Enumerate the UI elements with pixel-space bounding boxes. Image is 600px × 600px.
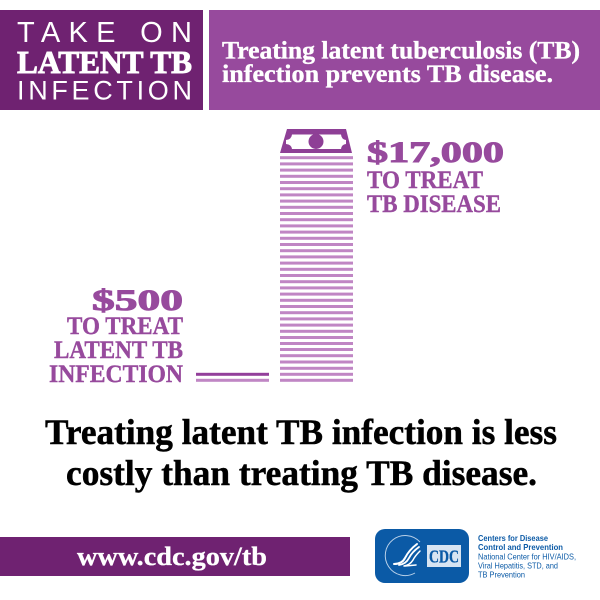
CDC organization text: National Center for HIV/AIDS, [478, 552, 576, 562]
chart bar: TB disease cost stack [280, 156, 353, 382]
chart bar: latent TB cost stack [196, 373, 269, 382]
title panel: LATENT TB [17, 44, 192, 80]
label: $17,000 to treat TB disease: TB DISEASE [367, 191, 501, 218]
subtitle panel [209, 10, 600, 110]
URL banner: www.cdc.gov/tb [77, 542, 267, 571]
label: $17,000 to treat TB disease: TO TREAT [367, 167, 483, 194]
CDC logo: CDC [429, 546, 459, 566]
CDC organization text [478, 533, 576, 580]
subtitle panel: Treating latent tuberculosis (TB) [222, 38, 580, 64]
CDC organization text: Control and Prevention [478, 542, 563, 552]
title panel [0, 10, 203, 110]
icon: money bill [280, 129, 352, 153]
CDC organization text: Centers for Disease [478, 533, 548, 543]
subtitle panel: infection prevents TB disease. [222, 61, 553, 88]
label: $17,000 to treat TB disease: $17,000 [367, 136, 504, 169]
title panel: INFECTION [17, 76, 192, 106]
label: $17,000 to treat TB disease [367, 136, 504, 218]
label: $500 to treat latent TB infection [49, 284, 183, 388]
CDC organization text: Viral Hepatitis, STD, and [478, 560, 558, 570]
CDC logo [375, 529, 469, 583]
main statement [45, 412, 557, 493]
label: $500 to treat latent TB infection: TO TREAT [67, 313, 183, 340]
main statement: costly than treating TB disease. [66, 453, 537, 493]
main statement: Treating latent TB infection is less [45, 412, 557, 452]
CDC organization text: TB Prevention [478, 570, 525, 580]
label: $500 to treat latent TB infection: INFECTION [49, 361, 183, 388]
label: $500 to treat latent TB infection: $500 [92, 284, 183, 317]
label: $500 to treat latent TB infection: LATENT TB [54, 337, 183, 364]
title panel: TAKE ON [17, 17, 192, 49]
URL banner [0, 537, 350, 576]
